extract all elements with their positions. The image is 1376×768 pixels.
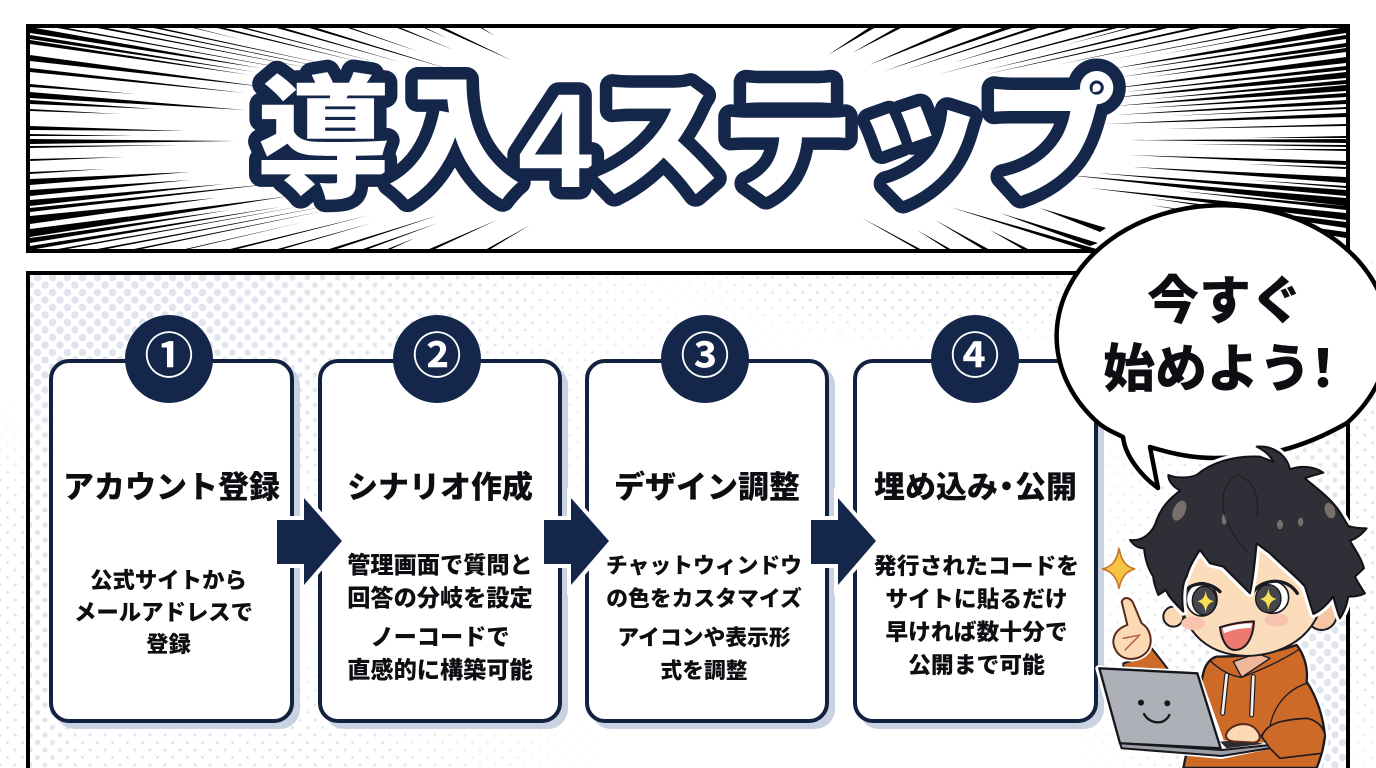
panel: step 2 card [318, 359, 562, 723]
panel: step 1 card [49, 359, 294, 723]
bubble text: 今すぐ [1147, 273, 1303, 331]
bubble text: 始めよう [1103, 341, 1311, 399]
step 4 description: 発行されたコードを [874, 553, 1079, 579]
sleeve [1262, 718, 1325, 758]
step 4 heading: 埋め込み・公開 [874, 470, 1077, 505]
step 3 description: チャットウィンドウ [606, 553, 802, 578]
step number 4: ④ [950, 330, 1000, 384]
step 1 description: 登録 [146, 632, 191, 657]
step 1 description: メールアドレスで [74, 600, 253, 625]
step 2 description: 回答の分岐を設定 ノーコードで [347, 585, 533, 650]
step 3 description [606, 553, 802, 683]
step number 1 [125, 315, 213, 403]
step number 4 [931, 315, 1019, 403]
step 4 description: サイトに貼るだけ [885, 586, 1068, 612]
panel: steps frame [26, 271, 1350, 768]
step 2 description: 直感的に構築可能 [347, 657, 533, 683]
step number 3: ③ [680, 330, 730, 384]
step 2 description: 管理画面で質問と [347, 552, 533, 578]
face [1180, 547, 1323, 656]
mouth [1220, 621, 1254, 650]
eyes [1184, 581, 1297, 616]
step number 2: ② [412, 330, 462, 384]
title: 導入4ステップ [256, 67, 1116, 216]
sparkle [1103, 548, 1135, 588]
step 4 description: 公開まで可能 [908, 652, 1045, 678]
pointing hand [1113, 598, 1151, 659]
step 1 heading: アカウント登録 [63, 470, 280, 505]
panel: title banner with speed lines [26, 24, 1350, 253]
laptop [1098, 668, 1270, 756]
step 3 heading: デザイン調整 [614, 470, 800, 505]
panel: step 3 card [585, 359, 829, 723]
step number 1: ① [144, 330, 194, 384]
keyboard hand [1226, 724, 1260, 743]
arrow: step 1 to 2 [277, 498, 342, 585]
hair [1130, 446, 1367, 618]
step 4 description [874, 553, 1079, 678]
halftone background [0, 261, 1374, 768]
speech bubble [1057, 205, 1376, 488]
step 3 description: 式を調整 [660, 658, 748, 683]
character: boy with laptop [1098, 446, 1367, 768]
step number 3 [661, 315, 749, 403]
hoodie body [1123, 645, 1325, 768]
arrow: step 3 to 4 [811, 498, 876, 585]
step 1 description [74, 568, 253, 657]
step 1 description: 公式サイトから [90, 568, 247, 593]
step 2 heading: シナリオ作成 [347, 470, 533, 505]
blush [1181, 617, 1205, 630]
arrow: step 2 to 3 [544, 498, 609, 585]
ears [1163, 607, 1183, 627]
panel: step 4 card [853, 359, 1098, 723]
step number 2 [393, 315, 481, 403]
step 4 description: 早ければ数十分で [885, 619, 1068, 645]
bubble text: ！ [1297, 341, 1349, 399]
step 2 description [347, 552, 533, 683]
step 3 description: の色をカスタマイズ アイコンや表示形 [606, 586, 802, 650]
